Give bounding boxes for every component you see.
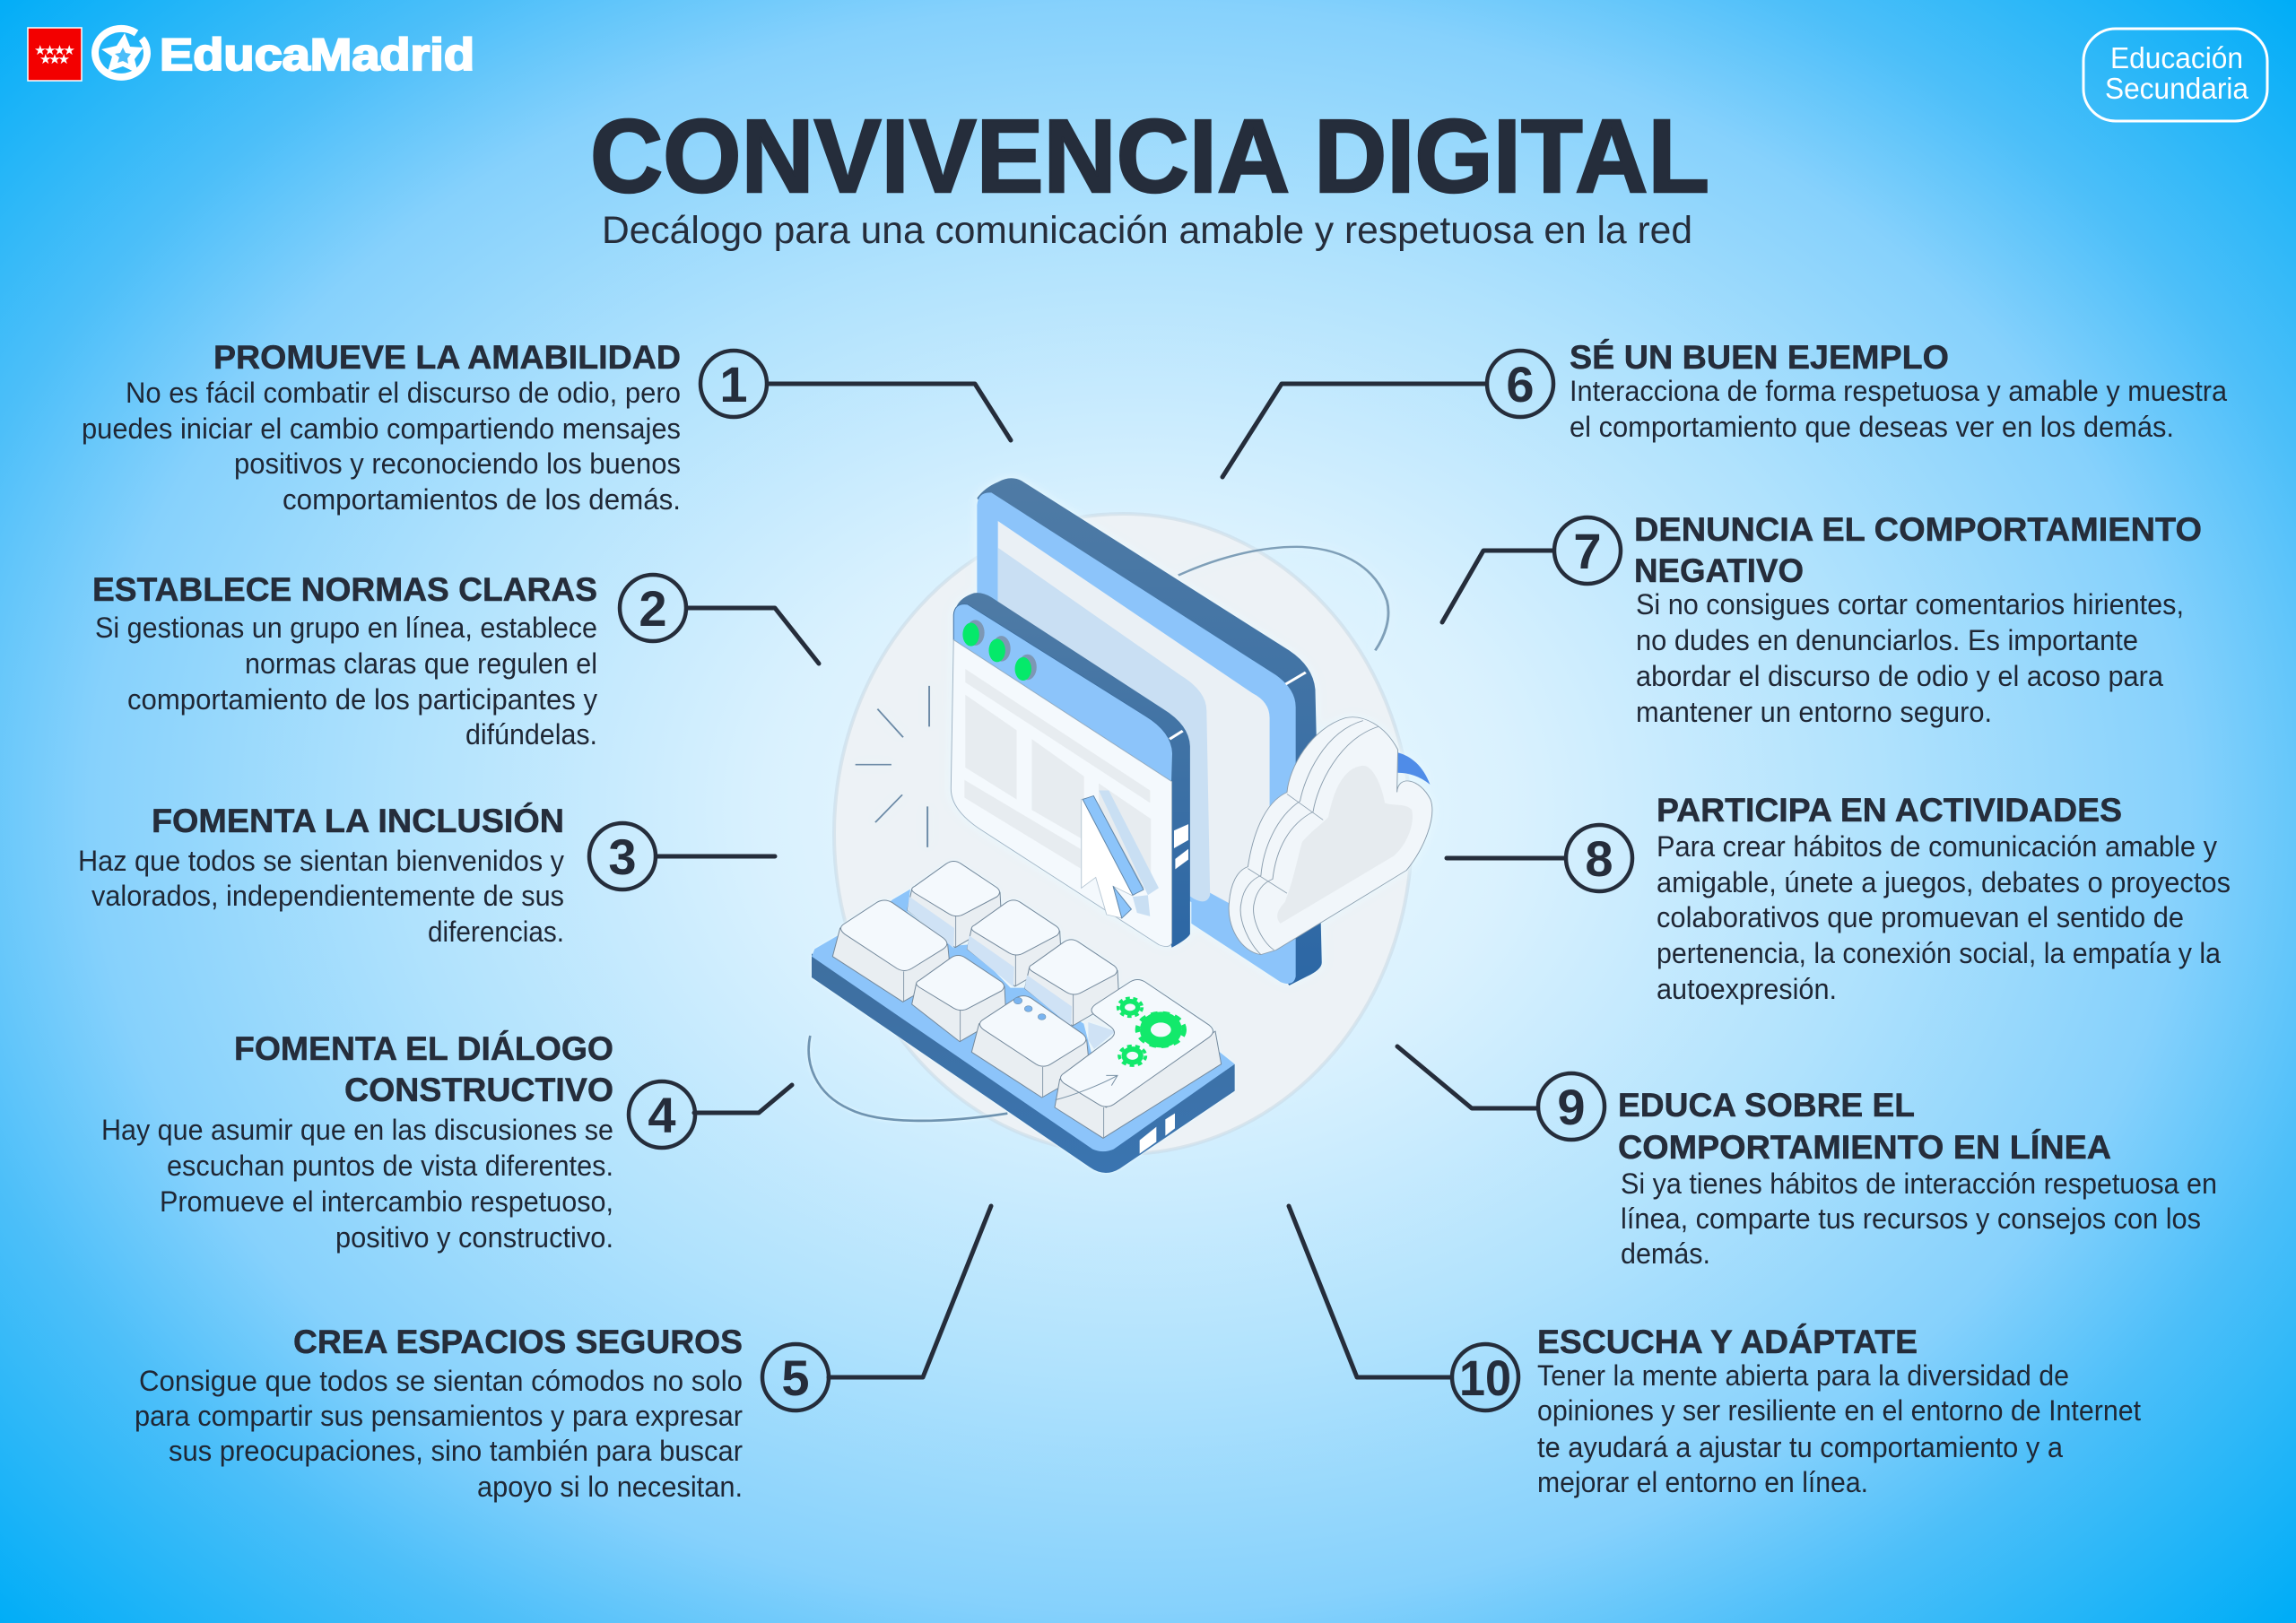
number 7 — [1554, 517, 1621, 584]
logo: Comunidad de Madrid flag: ★★★ — [39, 51, 70, 67]
body 2: comportamiento de los participantes y — [127, 683, 597, 716]
item 3: fomenta la inclusión — [78, 802, 775, 948]
heading 1: PROMUEVE LA AMABILIDAD — [213, 339, 681, 376]
connector 9 — [1397, 1046, 1537, 1108]
monitor, windows and cloud — [856, 478, 1432, 985]
swoosh line — [1178, 547, 1388, 650]
heading 6: SÉ UN BUEN EJEMPLO — [1570, 339, 1949, 376]
connector 4 — [694, 1085, 792, 1113]
body 5: sus preocupaciones, sino también para buscar — [169, 1435, 743, 1467]
body 3: Haz que todos se sientan bienvenidos y — [78, 845, 564, 877]
swoosh line — [809, 1036, 1007, 1121]
item 8: participa en actividades — [1447, 792, 2231, 1005]
connector 1 — [768, 384, 1011, 440]
body 3: valorados, independientemente de sus — [91, 880, 564, 912]
body 5 — [135, 1365, 743, 1503]
cloud — [1229, 717, 1432, 955]
number 4: 4 — [648, 1087, 676, 1143]
body 8: pertenencia, la conexión social, la empatía y la — [1657, 937, 2221, 969]
body 8: colaborativos que promuevan el sentido de — [1657, 901, 2184, 933]
connector 5 — [829, 1206, 991, 1377]
window content blocks — [964, 669, 1151, 888]
heading 7: NEGATIVO — [1634, 552, 1804, 589]
connector 8 — [1447, 855, 1565, 861]
number 10: 10 — [1459, 1350, 1511, 1406]
body 6: Interacciona de forma respetuosa y amable y muestra — [1570, 375, 2227, 407]
connector 6 — [1222, 384, 1486, 477]
item 10: escucha y adáptate — [1289, 1206, 2141, 1498]
badge: Educación Secundaria: Educación — [2110, 41, 2243, 74]
item 2: establece normas claras — [92, 571, 819, 751]
keyboard base — [812, 890, 1235, 1173]
body 1 — [82, 377, 681, 516]
number 1: 1 — [719, 356, 748, 412]
logo: EducaMadrid: EducaMadrid — [160, 30, 474, 80]
heading 2: ESTABLECE NORMAS CLARAS — [92, 571, 597, 608]
connector 3 — [657, 854, 775, 859]
heading 9: EDUCA SOBRE EL — [1618, 1087, 1915, 1124]
cursor — [1082, 791, 1159, 918]
key dots — [1013, 997, 1046, 1020]
body 5: Consigue que todos se sientan cómodos no solo — [139, 1365, 743, 1397]
body 7: no dudes en denunciarlos. Es importante — [1636, 624, 2138, 656]
key: upper right — [1025, 940, 1119, 1027]
body 1: positivos y reconociendo los buenos — [234, 447, 681, 480]
body 8: amigable, únete a juegos, debates o proyectos — [1657, 866, 2231, 898]
body 8: autoexpresión. — [1657, 973, 1837, 1005]
heading 7 — [1634, 511, 2202, 589]
number 9: 9 — [1557, 1079, 1586, 1135]
body 4: Hay que asumir que en las discusiones se — [101, 1114, 613, 1146]
number 1 — [700, 351, 767, 417]
key: gears — [1055, 979, 1222, 1138]
number 9 — [1538, 1073, 1605, 1140]
heading 9: COMPORTAMIENTO EN LÍNEA — [1618, 1129, 2111, 1166]
key: with dots — [971, 996, 1090, 1098]
key: lower middle — [912, 955, 1006, 1042]
item 9: educa sobre el comportamiento en línea — [1397, 1046, 2217, 1270]
number 4 — [629, 1081, 695, 1148]
heading 10: ESCUCHA Y ADÁPTATE — [1537, 1324, 1918, 1360]
arrow — [1056, 1075, 1118, 1100]
body 10 — [1537, 1359, 2141, 1498]
keyboard — [809, 861, 1235, 1173]
heading 8: PARTICIPA EN ACTIVIDADES — [1657, 792, 2122, 829]
body 4: Promueve el intercambio respetuoso, — [160, 1185, 613, 1218]
key shadow behind gears key — [1088, 1022, 1116, 1049]
item 5: crea espacios seguros — [135, 1206, 991, 1503]
number 8: 8 — [1585, 830, 1613, 887]
body 5: apoyo si lo necesitan. — [477, 1471, 743, 1503]
body 7: abordar el discurso de odio y el acoso para — [1636, 660, 2163, 692]
key: large left — [832, 900, 951, 1002]
back window — [977, 478, 1322, 985]
number 2 — [620, 575, 686, 641]
heading 9 — [1618, 1087, 2111, 1166]
key: back top — [908, 861, 1002, 948]
body 3: diferencias. — [428, 916, 564, 948]
background circle — [834, 514, 1412, 1154]
body 8 — [1657, 830, 2231, 1005]
body 4 — [101, 1114, 613, 1254]
number 7: 7 — [1573, 523, 1602, 579]
body 10: mejorar el entorno en línea. — [1537, 1466, 1868, 1498]
body 2: normas claras que regulen el — [245, 647, 597, 680]
number 2: 2 — [639, 580, 667, 637]
heading 4: CONSTRUCTIVO — [344, 1072, 613, 1108]
subtitle: Decálogo para una comunicación amable y respetuosa en la red — [602, 209, 1692, 252]
window dots — [962, 620, 1037, 681]
body 5: para compartir sus pensamientos y para expresar — [135, 1400, 743, 1432]
body 2: difúndelas. — [465, 718, 597, 751]
item 4: fomenta el diálogo constructivo — [101, 1030, 792, 1254]
heading 7: DENUNCIA EL COMPORTAMIENTO — [1634, 511, 2202, 548]
body 9 — [1621, 1167, 2217, 1270]
body 9: Si ya tienes hábitos de interacción respetuosa en — [1621, 1167, 2217, 1200]
body 2: Si gestionas un grupo en línea, establece — [95, 612, 597, 644]
item 1: promueve la amabilidad — [82, 339, 1011, 516]
logo: Comunidad de Madrid flag — [28, 28, 82, 81]
connector 2 — [687, 608, 819, 664]
body 2 — [95, 612, 597, 751]
body 7: Si no consigues cortar comentarios hirientes, — [1636, 588, 2184, 621]
body 6 — [1570, 375, 2227, 443]
icon: gears — [1118, 998, 1184, 1065]
central illustration — [809, 478, 1432, 1173]
number 3 — [589, 823, 656, 890]
number 3: 3 — [608, 829, 637, 885]
number 5: 5 — [781, 1350, 810, 1406]
number 6: 6 — [1506, 356, 1535, 412]
body 1: comportamientos de los demás. — [283, 483, 681, 516]
logo: Comunidad de Madrid flag: ★★★★ — [34, 42, 75, 58]
body 7: mantener un entorno seguro. — [1636, 696, 1992, 728]
body 7 — [1636, 588, 2184, 728]
item 7: denuncia el comportamiento negativo — [1442, 511, 2202, 728]
badge: Educación Secundaria: Secundaria — [2105, 72, 2249, 105]
front window — [951, 593, 1190, 948]
connector 7 — [1442, 551, 1553, 622]
number 5 — [762, 1344, 829, 1410]
spark rays — [856, 686, 929, 847]
key: upper middle — [967, 900, 1061, 987]
body 9: demás. — [1621, 1237, 1710, 1270]
body 4: escuchan puntos de vista diferentes. — [167, 1150, 613, 1182]
body 4: positivo y constructivo. — [335, 1221, 613, 1254]
title: CONVIVENCIA DIGITAL — [590, 98, 1709, 214]
body 10: opiniones y ser resiliente en el entorno de Internet — [1537, 1394, 2141, 1427]
connector 10 — [1289, 1206, 1451, 1377]
number 6 — [1487, 351, 1553, 417]
body 10: te ayudará a ajustar tu comportamiento y a — [1537, 1431, 2063, 1463]
body 1: puedes iniciar el cambio compartiendo mensajes — [82, 412, 681, 445]
body 10: Tener la mente abierta para la diversidad de — [1537, 1359, 2069, 1392]
number 8 — [1566, 825, 1632, 891]
body 3 — [78, 845, 564, 948]
heading 3: FOMENTA LA INCLUSIÓN — [152, 802, 564, 839]
body 1: No es fácil combatir el discurso de odio, pero — [126, 377, 681, 409]
body 6: el comportamiento que deseas ver en los demás. — [1570, 411, 2174, 443]
heading 4 — [234, 1030, 613, 1108]
heading 5: CREA ESPACIOS SEGUROS — [293, 1324, 743, 1360]
heading 4: FOMENTA EL DIÁLOGO — [234, 1030, 613, 1067]
body 9: línea, comparte tus recursos y consejos con los — [1621, 1202, 2201, 1235]
item 6: sé un buen ejemplo — [1222, 339, 2227, 477]
body 8: Para crear hábitos de comunicación amable y — [1657, 830, 2217, 863]
badge: Educación Secundaria — [2083, 29, 2267, 121]
